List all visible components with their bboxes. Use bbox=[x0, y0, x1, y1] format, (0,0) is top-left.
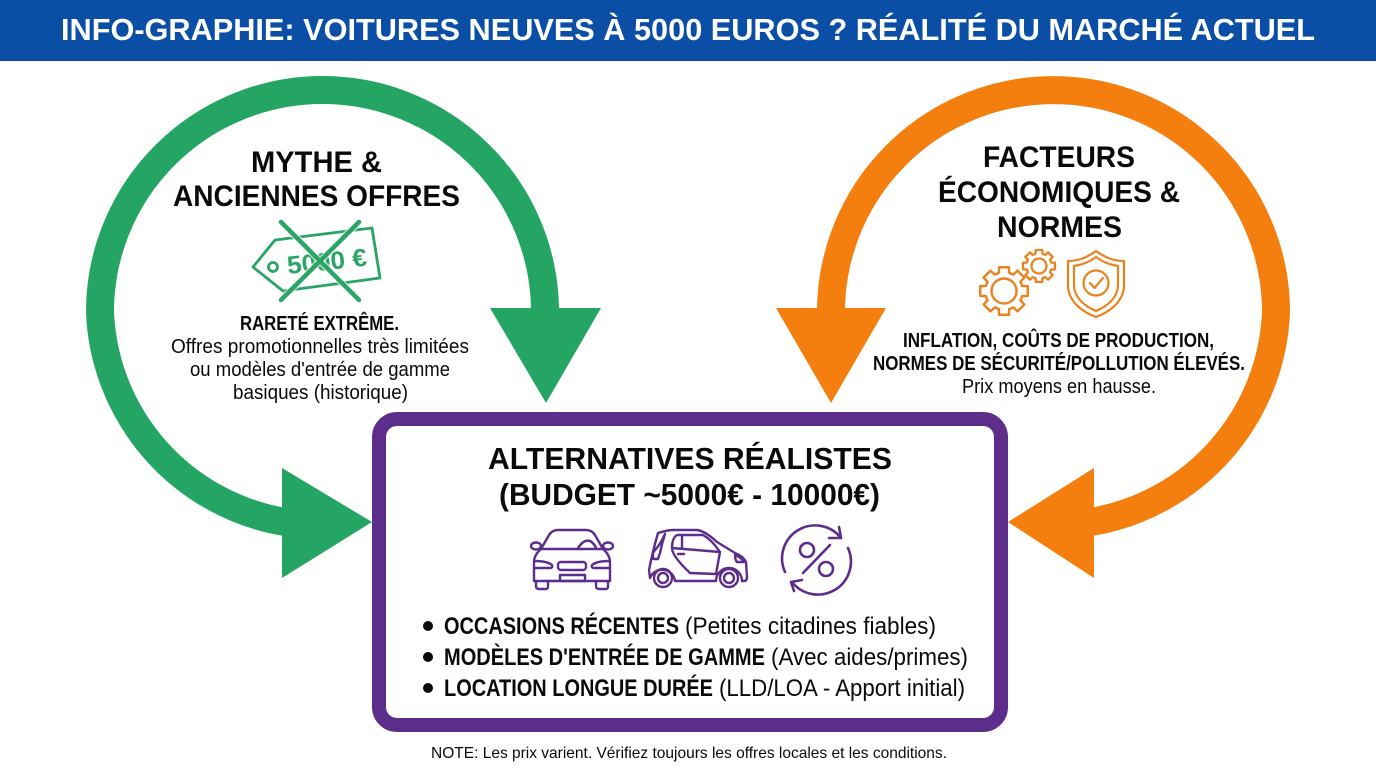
text: rareté extrême: basiques (historique) bbox=[233, 382, 408, 404]
text: inflation et normes bbox=[873, 328, 1245, 398]
icon: shield bbox=[1068, 251, 1124, 317]
heading: alternatives: (BUDGET ~5000€ - 10000€) bbox=[499, 477, 880, 512]
panel: alternatives réalistes bbox=[379, 419, 1001, 725]
icon: crossed out price tag: 5000 € bbox=[286, 244, 368, 280]
header banner bbox=[0, 0, 1376, 61]
heading: alternatives bbox=[488, 441, 892, 512]
heading: mythe: ANCIENNES OFFRES bbox=[173, 180, 460, 213]
heading: facteurs: ÉCONOMIQUES & bbox=[938, 175, 1180, 209]
icon: crossed out price tag bbox=[253, 222, 380, 300]
bullet: location longue durée: (LLD/LOA - Apport initial) bbox=[719, 675, 965, 702]
heading: mythe: MYTHE & bbox=[251, 146, 382, 179]
list of alternatives bbox=[423, 612, 968, 702]
panel: facteurs économiques et normes bbox=[873, 141, 1245, 398]
heading: mythe bbox=[173, 146, 460, 213]
bullet: location longue durée bbox=[423, 674, 965, 702]
text: rareté extrême: ou modèles d'entrée de gamme bbox=[190, 359, 450, 381]
text: inflation et normes: NORMES DE SÉCURITÉ/POLLUTION ÉLEVÉS. bbox=[873, 352, 1245, 375]
heading: alternatives: ALTERNATIVES RÉALISTES bbox=[488, 441, 892, 476]
icon: small city car bbox=[649, 530, 747, 587]
text: inflation et normes: INFLATION, COÛTS DE PRODUCTION, bbox=[903, 328, 1214, 352]
bullet: modèles d'entrée de gamme: (Avec aides/primes) bbox=[771, 644, 968, 671]
icon: percent with circular arrows bbox=[782, 525, 851, 595]
green circular arrow bbox=[100, 90, 601, 578]
footnote: NOTE: Les prix varient. Vérifiez toujours les offres locales et les conditions. bbox=[431, 745, 947, 762]
text: inflation et normes: Prix moyens en hausse. bbox=[962, 376, 1156, 398]
title: INFO-GRAPHIE: VOITURES NEUVES À 5000 EUROS ? RÉALITÉ DU MARCHÉ ACTUEL bbox=[61, 12, 1315, 47]
text: rareté extrême bbox=[171, 311, 469, 404]
bullet: modèles d'entrée de gamme: MODÈLES D'ENTRÉE DE GAMME bbox=[444, 643, 765, 671]
bullet: location longue durée: LOCATION LONGUE DURÉE bbox=[444, 674, 713, 702]
icon: gears bbox=[980, 250, 1055, 315]
heading: facteurs bbox=[938, 141, 1180, 244]
icon: car front bbox=[531, 530, 613, 589]
panel: mythe et anciennes offres bbox=[171, 146, 469, 404]
bullet: occasions récentes: OCCASIONS RÉCENTES bbox=[444, 612, 679, 640]
bullet: occasions récentes bbox=[423, 612, 936, 640]
heading: facteurs: NORMES bbox=[997, 211, 1122, 244]
text: rareté extrême: Offres promotionnelles très limitées bbox=[171, 336, 469, 358]
text: rareté extrême: RARETÉ EXTRÊME. bbox=[240, 311, 399, 335]
heading: facteurs: FACTEURS bbox=[983, 141, 1135, 174]
bullet: occasions récentes: (Petites citadines fiables) bbox=[685, 613, 936, 640]
orange circular arrow bbox=[776, 90, 1276, 578]
bullet: modèles d'entrée de gamme bbox=[423, 643, 968, 671]
